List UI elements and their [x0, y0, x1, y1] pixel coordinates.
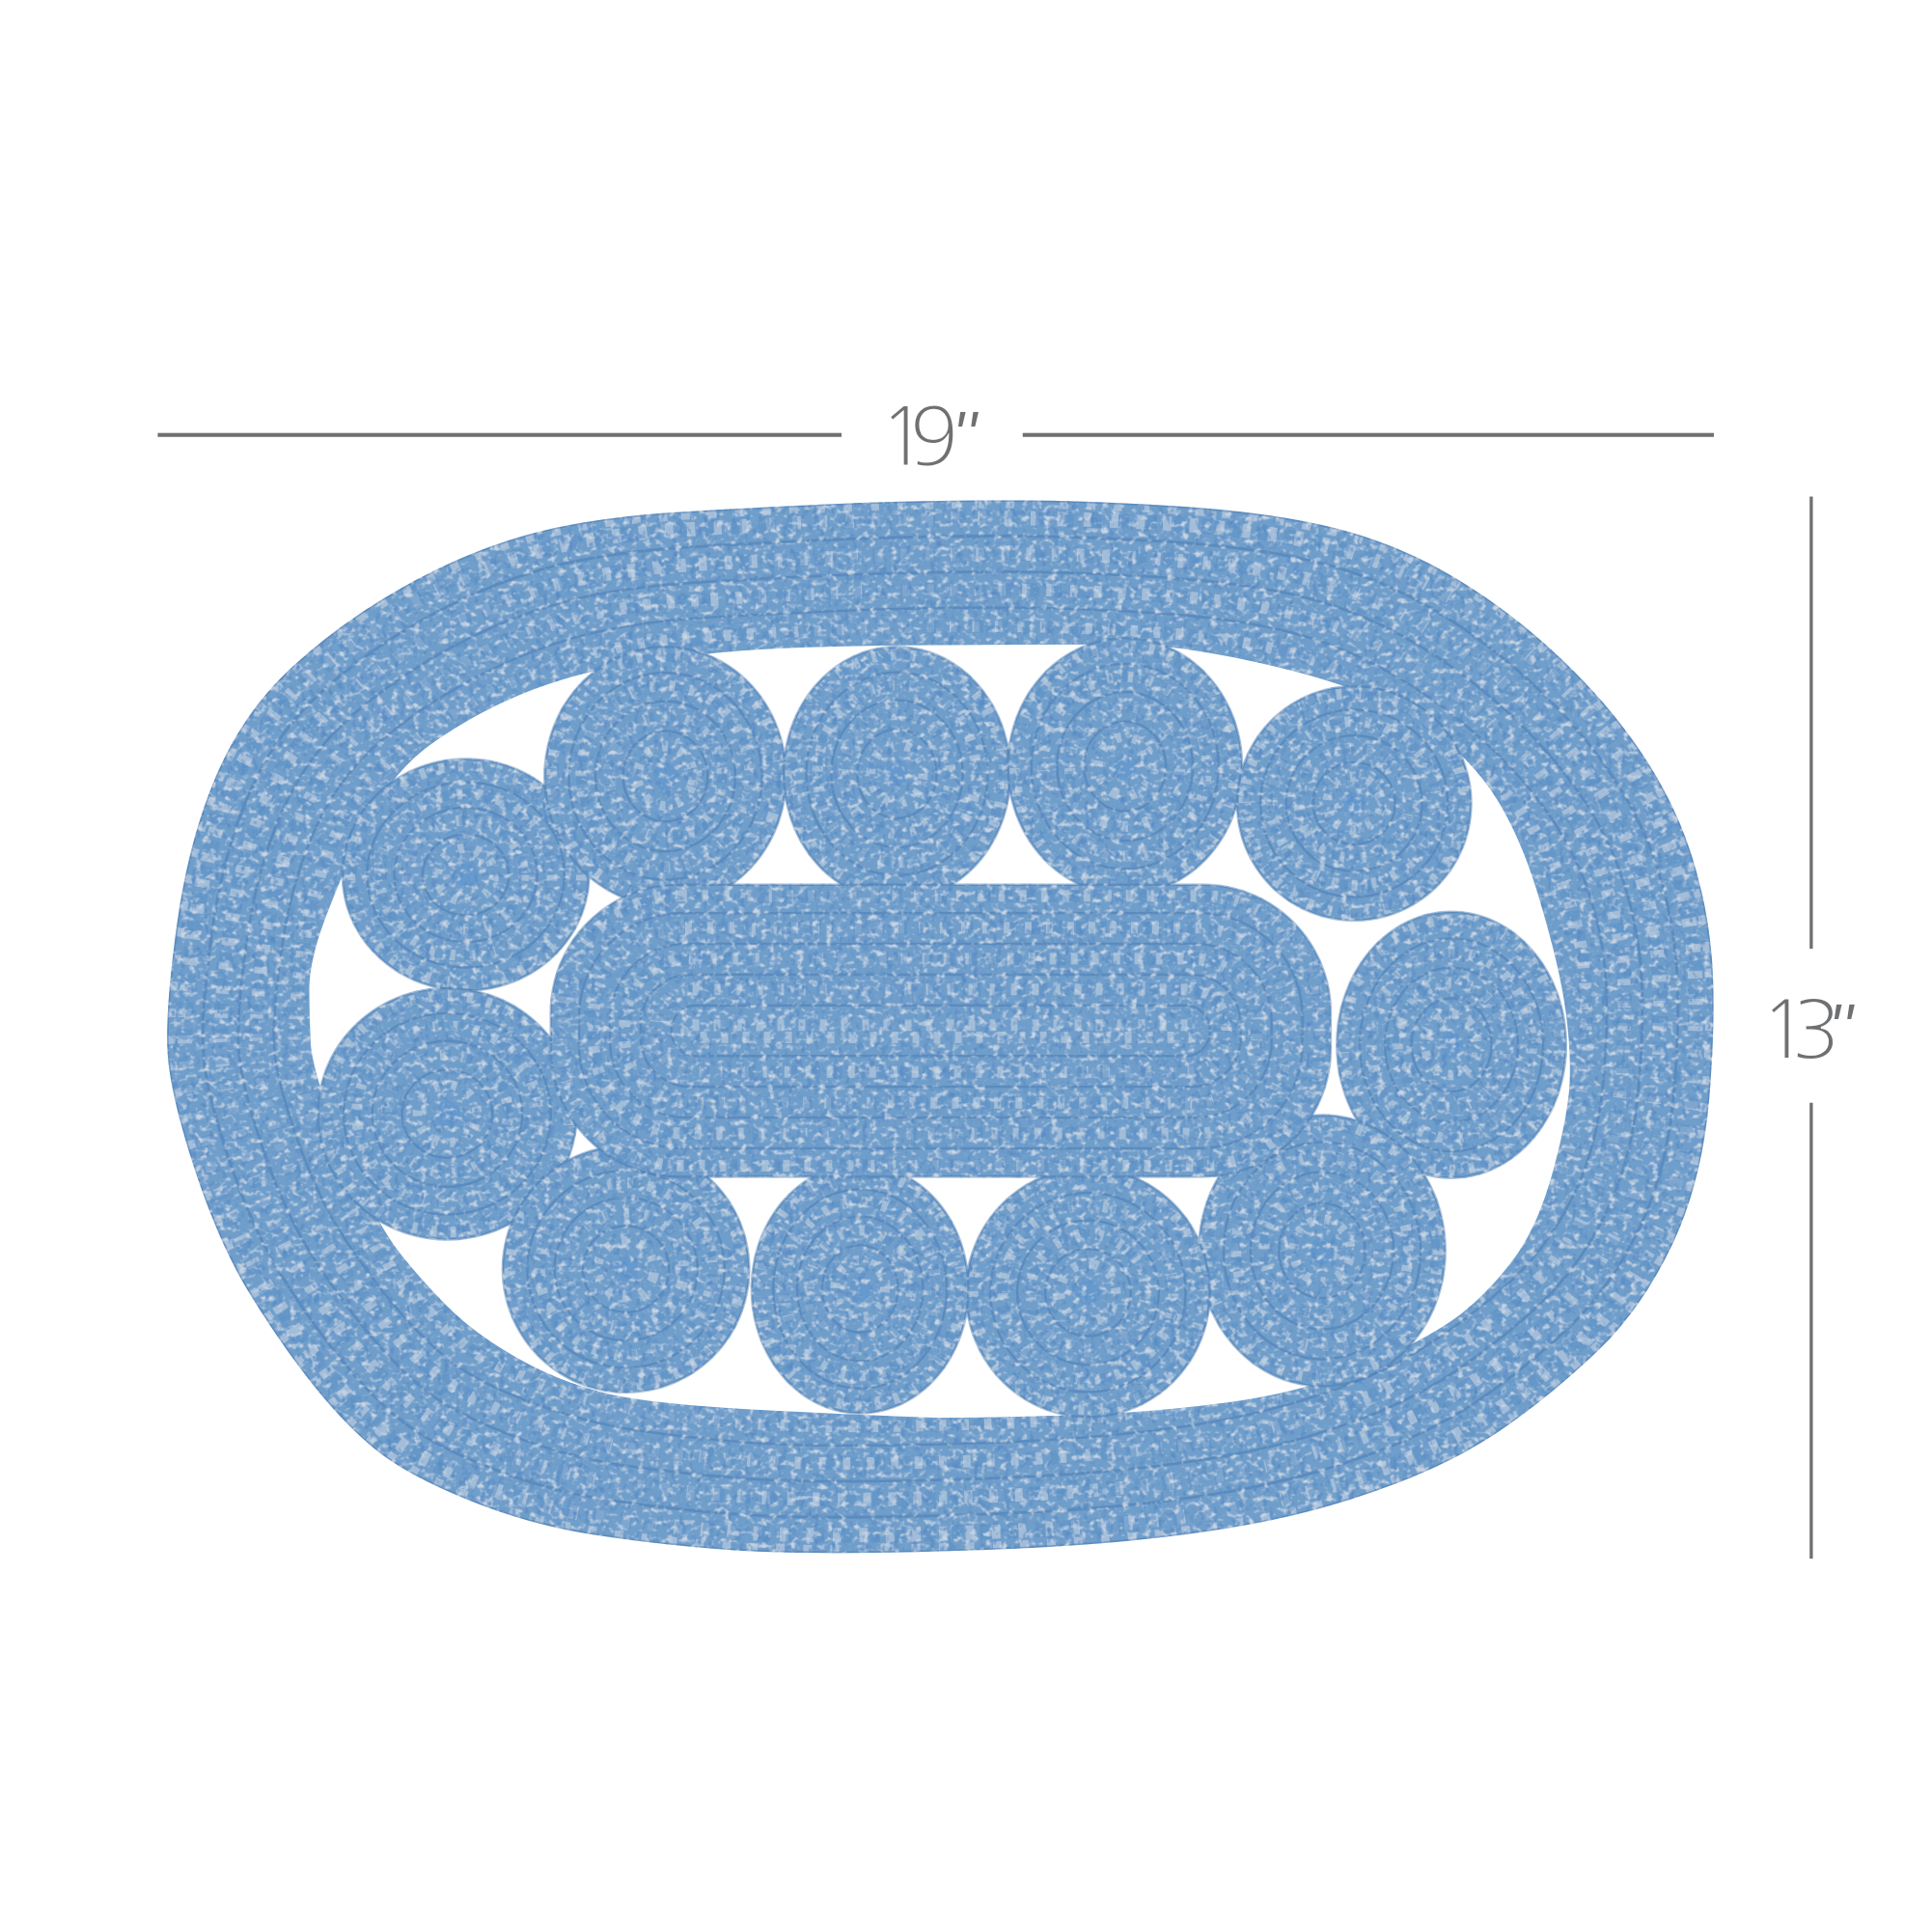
coiled disc 3	[752, 611, 1042, 936]
coiled disc 6	[1305, 874, 1598, 1215]
height dimension: 13 inches: 13	[1759, 990, 1834, 1071]
coiled disc 9	[707, 1114, 1012, 1464]
coiled disc 8	[947, 1148, 1229, 1437]
width dimension: 19 inches: 19	[878, 398, 953, 479]
coiled disc 1	[343, 759, 589, 991]
central oval braid	[551, 885, 1331, 1176]
width dimension: 19 inches: "	[952, 397, 980, 477]
coiled disc 11	[265, 937, 629, 1291]
coiled disc 2	[511, 611, 820, 942]
height dimension: 13 inches	[1759, 497, 1856, 1559]
coiled disc 7	[1154, 1065, 1490, 1436]
height dimension: 13 inches: "	[1827, 989, 1856, 1069]
coiled disc 5	[1194, 644, 1514, 963]
outer braided ring	[148, 481, 1737, 1577]
coiled disc 4	[975, 602, 1275, 930]
width dimension: 19 inches	[157, 397, 1714, 479]
coiled disc 10	[475, 1118, 777, 1420]
braided placemat	[148, 481, 1737, 1577]
